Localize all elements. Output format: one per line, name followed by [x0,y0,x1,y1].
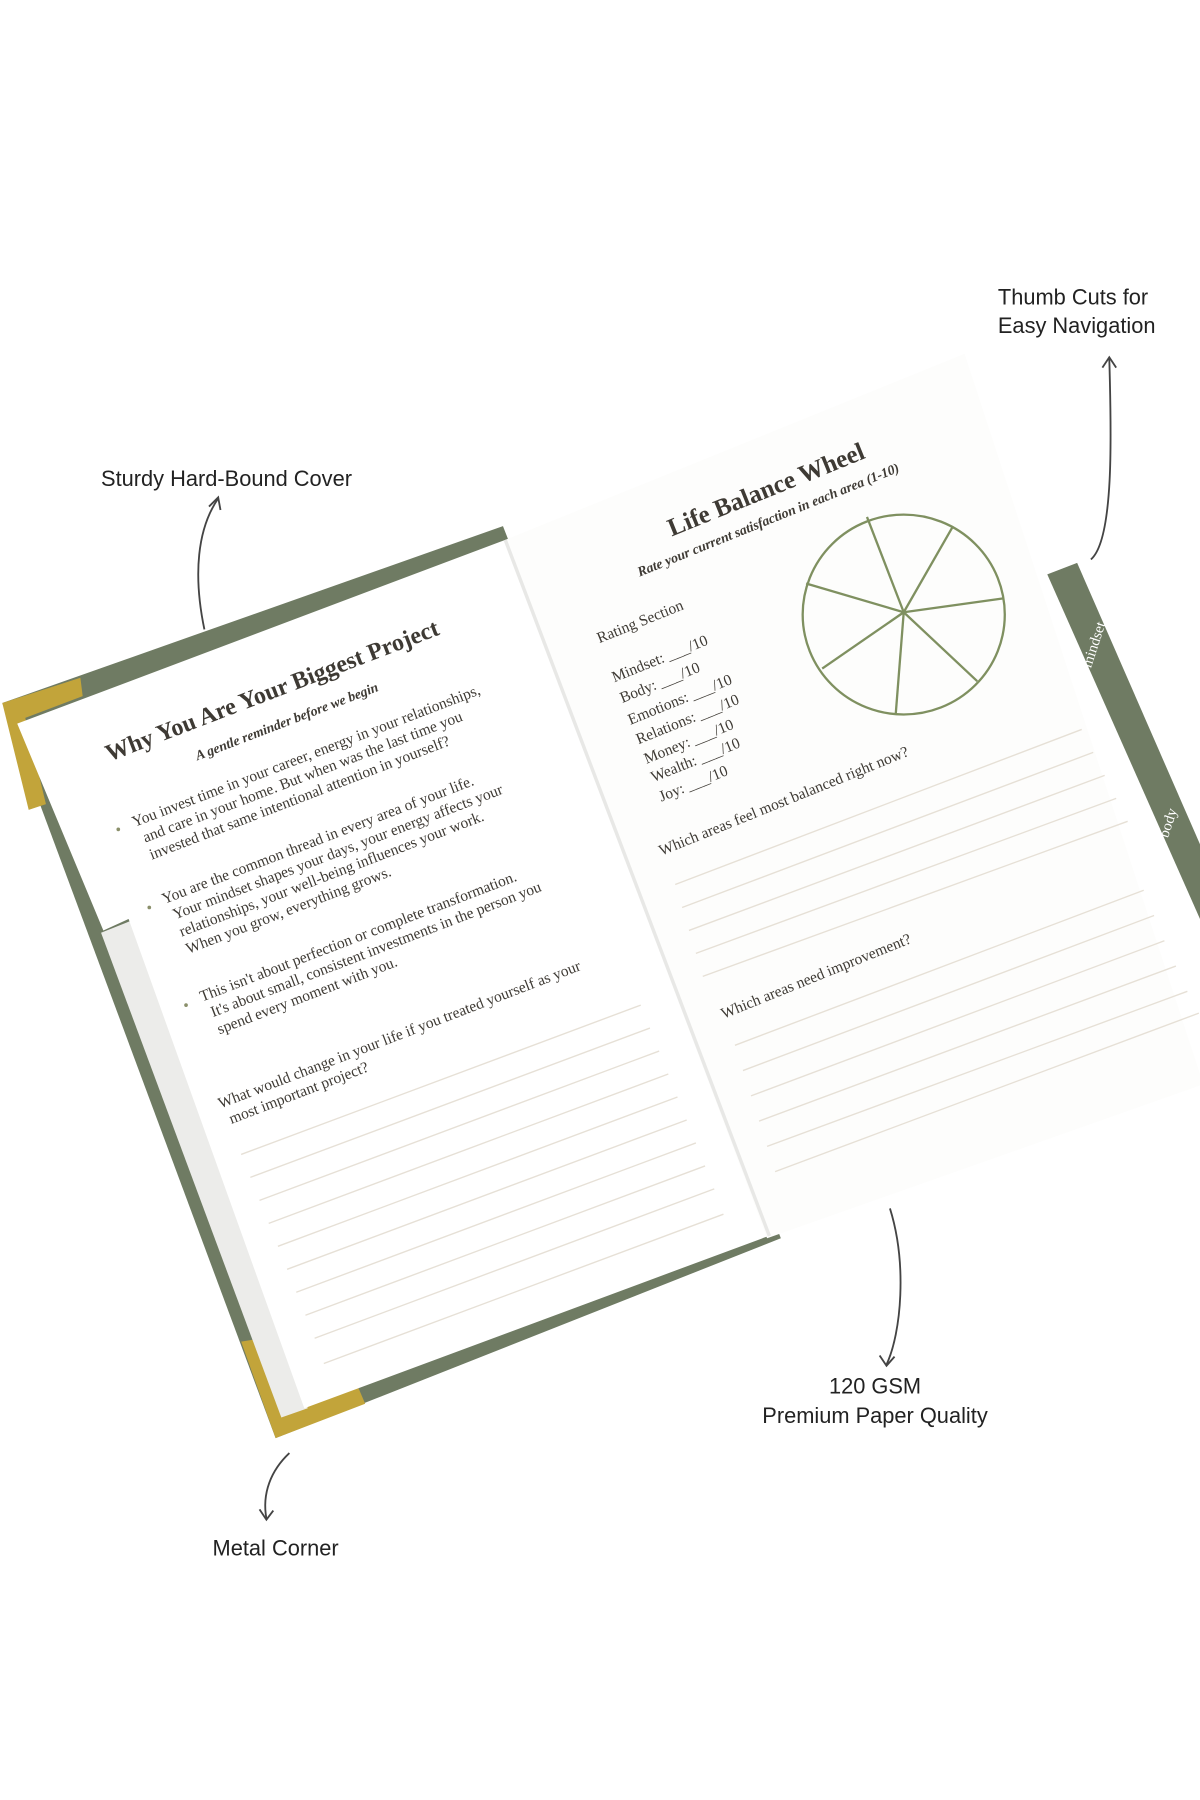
title: Why You Are Your Biggest Project [102,616,443,767]
rating section: Mindset: ___/10 [609,632,711,686]
page edges grey [101,919,308,1417]
bullets: This isn't about perfection or complete transformation. [197,868,519,1005]
title: Life Balance Wheel [664,437,869,542]
bullets: Your mindset shapes your days, your energy affects your [170,781,506,923]
wheel chart [803,515,1005,714]
annotation: cover: Sturdy Hard-Bound Cover [101,466,352,491]
annotation: metal corner [213,1453,339,1560]
rating section: Body: ___/10 [618,659,703,707]
book [2,354,1200,1438]
tab label body: body [1156,806,1181,840]
annotation: cover [101,466,352,629]
rating section: Rating Section [595,597,686,647]
bullets: and care in your home. But when was the last time you [141,708,465,846]
bullets: invested that same intentional attention in yourself? [147,733,452,863]
tab label mindset: mindset [1079,619,1110,670]
subtitle: Rate your current satisfaction in each area (1-10) [634,460,902,581]
annotation: paper: 120 GSM [829,1373,921,1398]
rating section: Joy: ___/10 [657,762,731,805]
bullets: spend every moment with you. [215,954,400,1038]
question 1: Which areas feel most balanced right now? [657,743,911,859]
rating section: Emotions: ___/10 [626,671,735,729]
annotation: metal corner: Metal Corner [213,1535,339,1560]
left page content [102,616,723,1363]
annotation: paper: Premium Paper Quality [762,1403,988,1428]
bullets: When you grow, everything grows. [184,863,394,958]
rating section: Wealth: ___/10 [649,735,743,786]
annotation: thumb cuts: Easy Navigation [998,313,1155,338]
bullets [116,682,551,1040]
right page [505,354,1200,1238]
rating section: Relations: ___/10 [634,691,742,748]
rating section: Money: ___/10 [642,716,736,768]
bullets: You invest time in your career, energy in your relationships, [130,682,483,831]
cover [2,526,781,1438]
question: What would change in your life if you treated yourself as your [216,957,584,1112]
metal corner bottom [241,1338,365,1438]
writing lines [241,1005,723,1363]
annotation: thumb cuts: Thumb Cuts for [998,284,1148,309]
question: most important project? [227,1059,371,1128]
bullets: It's about small, consistent investments in the person you [208,878,544,1021]
thumb tabs strip [1047,563,1200,919]
annotation: paper [762,1208,988,1428]
metal corner top [2,678,83,810]
question 2: Which areas need improvement? [719,931,914,1023]
annotation: thumb cuts [998,284,1155,559]
subtitle: A gentle reminder before we begin [192,679,380,764]
rating section [595,597,743,805]
bullets: You are the common thread in every area of your life. [160,773,476,908]
left page [17,540,772,1408]
right page content [595,437,1199,1172]
bullets: relationships, your well-being influences your work. [177,808,486,940]
